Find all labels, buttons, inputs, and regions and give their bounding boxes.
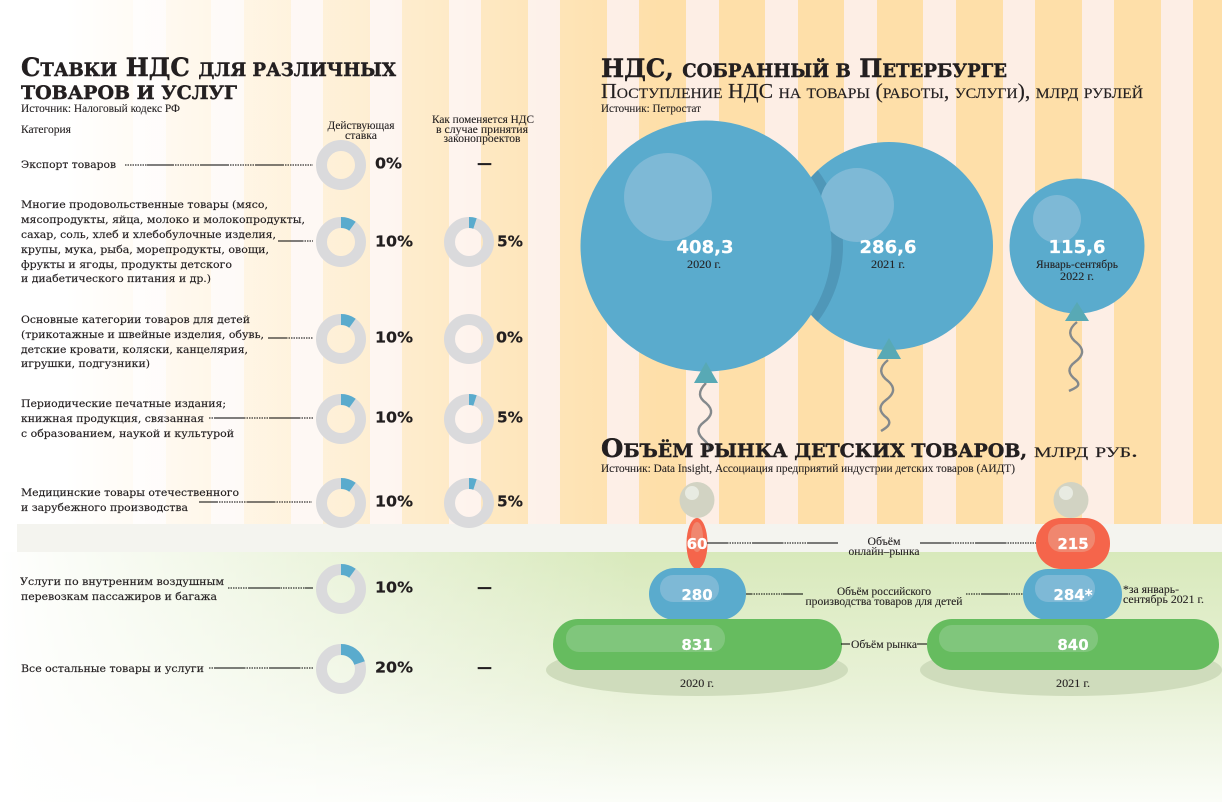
row: children's goods: 10%	[375, 328, 413, 346]
balloon: January-September 2022: 115,6	[1049, 237, 1105, 258]
row: air transport: Услуги по внутренним воздушным	[20, 576, 224, 588]
row: food products: и диабетического питания и др.)	[21, 273, 211, 285]
row: medical goods: 5%	[497, 492, 523, 510]
balloon: 2021: 2021 г.	[871, 259, 905, 271]
row: air transport: перевозкам пассажиров и багажа	[21, 591, 217, 603]
row: food products	[21, 199, 523, 285]
row: children's goods: (трикотажные и швейные изделия, обувь,	[21, 329, 264, 341]
column header: proposed change: Как поменяется НДС	[432, 114, 534, 126]
row: all other goods: —	[477, 658, 492, 676]
balloon: 2020: 408,3	[677, 237, 733, 258]
column header: current rate: ставка	[345, 130, 377, 142]
column header: proposed change	[432, 114, 534, 145]
footnote: January-September 2021: сентябрь 2021 г.	[1123, 594, 1204, 606]
toy stack: 2020: 280	[681, 586, 713, 604]
column header: current rate	[328, 120, 395, 142]
footnote: January-September 2021	[1123, 584, 1204, 606]
row: food products: Многие продовольственные товары (мясо,	[21, 199, 268, 211]
toy stack: 2021: 840	[1057, 636, 1089, 654]
legend: online market: онлайн–рынка	[848, 546, 920, 558]
title: children's goods market: ОБЪЁМ РЫНКА ДЕТСКИХ ТОВАРОВ,	[601, 434, 1027, 463]
row: printed publications	[21, 394, 523, 440]
legend: total market: Объём рынка	[851, 639, 917, 651]
row: children's goods	[21, 314, 523, 370]
toy stack: 2021: 215	[1057, 535, 1089, 553]
row: medical goods	[21, 478, 523, 522]
title: children's goods market: млрд руб.	[1034, 438, 1138, 462]
row: children's goods: 0%	[496, 328, 523, 346]
legend: Russian production: производства товаров для детей	[806, 596, 962, 608]
row: printed publications: Периодические печатные издания;	[21, 398, 226, 410]
row: food products: крупы, мука, рыба, морепродукты, овощи,	[21, 244, 269, 256]
column header: category: Категория	[21, 124, 72, 136]
row: children's goods: Основные категории товаров для детей	[21, 314, 250, 326]
row: printed publications: книжная продукция, связанная	[21, 413, 204, 425]
row: printed publications: 5%	[497, 408, 523, 426]
title: VAT rates: СТАВКИ НДС ДЛЯ РАЗЛИЧНЫХ	[21, 53, 397, 82]
row: food products: сахар, соль, хлеб и хлебобулочные изделия,	[21, 229, 276, 241]
row: medical goods: 10%	[375, 492, 413, 510]
row: children's goods: игрушки, подгузники)	[21, 358, 150, 370]
source: Petrostat: Источник: Петростат	[601, 103, 701, 115]
legend: Russian production	[746, 586, 1023, 608]
row: printed publications: 10%	[375, 408, 413, 426]
row: air transport	[20, 564, 492, 608]
row: export of goods: —	[477, 154, 492, 172]
row: air transport: —	[477, 578, 492, 596]
row: export of goods	[21, 146, 492, 184]
row: air transport: 10%	[375, 578, 413, 596]
row: food products: мясопродукты, яйца, молоко и молокопродукты,	[21, 214, 305, 226]
column header: current rate: Действующая	[328, 120, 395, 132]
row: all other goods: 20%	[375, 658, 413, 676]
column header: proposed change: законопроектов	[444, 133, 521, 145]
source: Data Insight: Источник: Data Insight, Ассоциация предприятий индустрии детских товаров (АИДТ)	[601, 463, 1015, 475]
toy stack: 2021: 2021 г.	[1056, 678, 1090, 690]
row: medical goods: Медицинские товары отечественного	[21, 487, 239, 499]
legend: Russian production: Объём российского	[837, 586, 931, 598]
title: VAT rates	[21, 53, 397, 104]
title: VAT rates: ТОВАРОВ И УСЛУГ	[21, 83, 237, 104]
toy stack: 2021	[920, 482, 1222, 696]
footnote: January-September 2021: *за январь-	[1123, 584, 1179, 596]
row: all other goods	[21, 644, 492, 688]
title: VAT in St Petersburg: НДС, СОБРАННЫЙ В ПЕТЕРБУРГЕ	[601, 54, 1007, 83]
row: export of goods: 0%	[375, 154, 402, 172]
toy stack: 2020: 60	[687, 535, 707, 553]
row: printed publications: с образованием, наукой и культурой	[21, 428, 234, 440]
balloon: 2021	[811, 142, 993, 432]
balloon: January-September 2022: 2022 г.	[1060, 271, 1094, 283]
source: tax code: Источник: Налоговый кодекс РФ	[21, 103, 180, 115]
balloon: 2020: 2020 г.	[687, 259, 721, 271]
subtitle: VAT receipts: Поступление НДС на товары (работы, услуги), млрд рублей	[601, 79, 1143, 103]
row: food products: фрукты и ягоды, продукты детского	[21, 259, 232, 271]
toy stack: 2020: 2020 г.	[680, 678, 714, 690]
row: all other goods: Все остальные товары и услуги	[21, 663, 204, 675]
balloon: January-September 2022	[1010, 178, 1144, 391]
balloon: 2021: 286,6	[860, 237, 916, 258]
row: children's goods: детские кровати, коляски, канцелярия,	[21, 344, 248, 356]
row: export of goods: Экспорт товаров	[21, 159, 116, 171]
row: medical goods: и зарубежного производства	[21, 502, 188, 514]
legend: online market	[707, 536, 1036, 558]
balloon: January-September 2022: Январь-сентябрь	[1036, 259, 1118, 271]
row: food products: 10%	[375, 232, 413, 250]
toy stack: 2021: 284*	[1053, 586, 1093, 604]
balloon: 2020	[580, 120, 832, 452]
column header: proposed change: в случае принятия	[436, 124, 529, 136]
toy stack: 2020: 831	[681, 636, 713, 654]
legend: online market: Объём	[868, 536, 901, 548]
toy stack: 2020	[546, 482, 848, 696]
row: food products: 5%	[497, 232, 523, 250]
